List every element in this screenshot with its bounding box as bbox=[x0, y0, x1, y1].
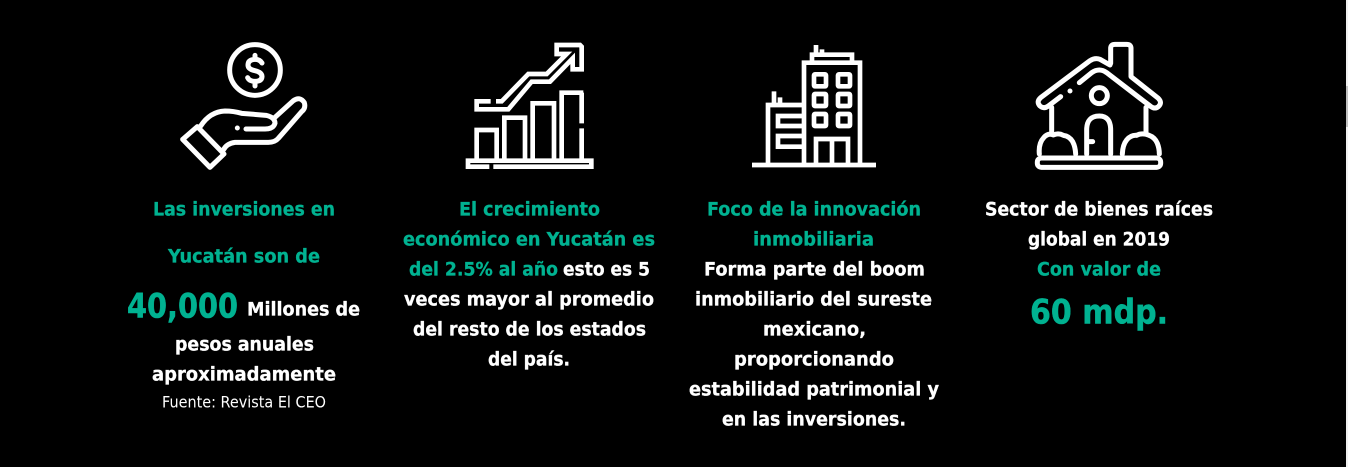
icon part: coin bbox=[230, 45, 280, 95]
text block: economic growth: del resto de los estados bbox=[413, 320, 646, 341]
icon: hand holding coin bbox=[183, 45, 305, 167]
figure: 60 mdp: 60 mdp. bbox=[1030, 293, 1168, 332]
figure: 40,000: 40,000 bbox=[127, 287, 238, 326]
icon part: arrow bbox=[477, 45, 582, 109]
icon part: hand bbox=[183, 99, 305, 167]
icon part: windows bbox=[814, 74, 850, 126]
text block: investments: Millones de bbox=[247, 300, 360, 321]
text block: economic growth bbox=[403, 200, 655, 371]
text block: economic growth: veces mayor al promedio bbox=[404, 290, 654, 311]
text block: real estate innovation: Foco de la innovación bbox=[707, 200, 921, 221]
text block: investments: Fuente: Revista El CEO bbox=[162, 393, 326, 412]
text block: global real estate sector: Con valor de bbox=[1037, 260, 1161, 281]
text block: investments: aproximadamente bbox=[152, 365, 336, 386]
text block: real estate innovation: estabilidad patrimonial y bbox=[689, 380, 939, 401]
text block: real estate innovation: inmobiliaria bbox=[753, 230, 874, 251]
text block: real estate innovation: inmobiliario del sureste bbox=[695, 290, 932, 311]
text block: real estate innovation: en las inversiones. bbox=[722, 410, 906, 431]
text block: real estate innovation: Forma parte del boom bbox=[704, 260, 925, 281]
text block: real estate innovation: proporcionando bbox=[734, 350, 894, 371]
icon: office buildings bbox=[752, 45, 876, 165]
text block: investments: Las inversiones en bbox=[153, 200, 335, 221]
text block: economic growth: esto es 5 bbox=[563, 260, 650, 281]
text block: investments: Yucatán son de bbox=[167, 247, 320, 268]
text block: economic growth: El crecimiento bbox=[459, 200, 600, 221]
text block: economic growth: del 2.5% al año bbox=[409, 260, 558, 281]
icon: house bbox=[1037, 44, 1161, 167]
text block: global real estate sector: global en 2019 bbox=[1028, 230, 1170, 251]
text block: economic growth: económico en Yucatán es bbox=[403, 230, 655, 251]
text block: global real estate sector: Sector de bienes raíces bbox=[985, 200, 1213, 221]
icon part: bars bbox=[468, 93, 591, 167]
text block: global real estate sector bbox=[985, 200, 1213, 332]
text block: real estate innovation bbox=[689, 200, 939, 431]
icon: growth chart bbox=[468, 45, 591, 167]
text block: investments bbox=[127, 200, 360, 412]
text block: investments: pesos anuales bbox=[175, 335, 314, 356]
text block: economic growth: del país. bbox=[488, 350, 570, 371]
text block: real estate innovation: mexicano, bbox=[763, 320, 866, 341]
